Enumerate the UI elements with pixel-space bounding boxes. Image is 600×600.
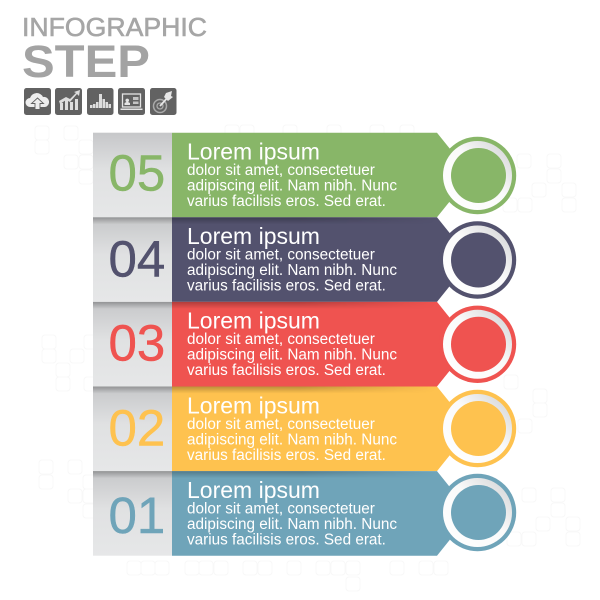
step 01 text: adipiscing elit. Nam nibh. Nunc [187,516,397,533]
icon: target with arrow [150,88,176,115]
step 05 text [187,138,397,210]
step 03 number: 03 [108,314,165,372]
step 02 number: 02 [108,400,165,456]
step 05 text: adipiscing elit. Nam nibh. Nunc [187,178,397,194]
step 04 text [187,223,397,295]
step 01 arrow banner [172,471,471,556]
icon: rising bars with arrow [55,88,82,115]
step 04 circle [439,221,516,299]
step 04 text: varius facilisis eros. Sed erat. [187,278,386,295]
step 02 number tab [93,386,172,471]
step 05 arrow banner [172,133,471,217]
step 03 text: Lorem ipsum [187,308,320,334]
title: STEP: STEP [22,36,150,87]
title: INFOGRAPHIC: INFOGRAPHIC [22,14,207,42]
step 01 number: 01 [108,487,165,544]
step 04 text: adipiscing elit. Nam nibh. Nunc [187,262,397,279]
step 01 text: Lorem ipsum [187,477,320,503]
step 05 text: Lorem ipsum [187,138,320,164]
step 03 arrow banner [172,302,471,386]
step 04 top shadow [93,217,395,224]
step 02 text: dolor sit amet, consectetuer [187,416,375,433]
step 04 number tab [93,217,172,302]
step 03 text: varius facilisis eros. Sed erat. [187,362,386,379]
step 05 number tab [93,133,172,217]
step 02 text: Lorem ipsum [187,392,320,418]
step 01 text [187,477,397,548]
step 01 top shadow [93,471,410,477]
icon: laptop with profile [118,88,145,115]
step 04 number: 04 [108,230,165,288]
step 05 text: dolor sit amet, consectetuer [187,162,375,179]
step 02 text: adipiscing elit. Nam nibh. Nunc [187,431,397,448]
step 04 text: dolor sit amet, consectetuer [187,247,375,264]
icon: cloud upload [24,88,51,115]
step 05 circle [439,137,516,214]
step 02 arrow banner [172,386,471,471]
step 03 circle [439,306,516,383]
step 04 panel [93,217,516,302]
background pattern of faint squares [35,125,580,591]
step 03 number tab [93,302,172,386]
icon: bar histogram [87,88,114,115]
step 03 panel [93,302,516,386]
step 02 text [187,392,397,464]
step 03 text: adipiscing elit. Nam nibh. Nunc [187,347,397,364]
step 04 text: Lorem ipsum [187,223,320,249]
step 03 top shadow [93,302,417,308]
step 04 arrow banner [172,217,471,302]
step 05 number: 05 [108,144,165,202]
step 01 circle [439,474,516,551]
step 01 text: dolor sit amet, consectetuer [187,500,375,517]
step 01 number tab [93,471,172,556]
step 03 text: dolor sit amet, consectetuer [187,331,375,348]
step 02 circle [439,390,516,467]
step 01 text: varius facilisis eros. Sed erat. [187,531,386,548]
step 01 panel [93,471,516,556]
step 03 text [187,308,397,379]
step 02 text: varius facilisis eros. Sed erat. [187,447,386,464]
step 05 text: varius facilisis eros. Sed erat. [187,193,386,210]
step 02 top shadow [93,386,418,392]
step 02 panel [93,386,516,471]
step 05 panel [93,133,516,217]
